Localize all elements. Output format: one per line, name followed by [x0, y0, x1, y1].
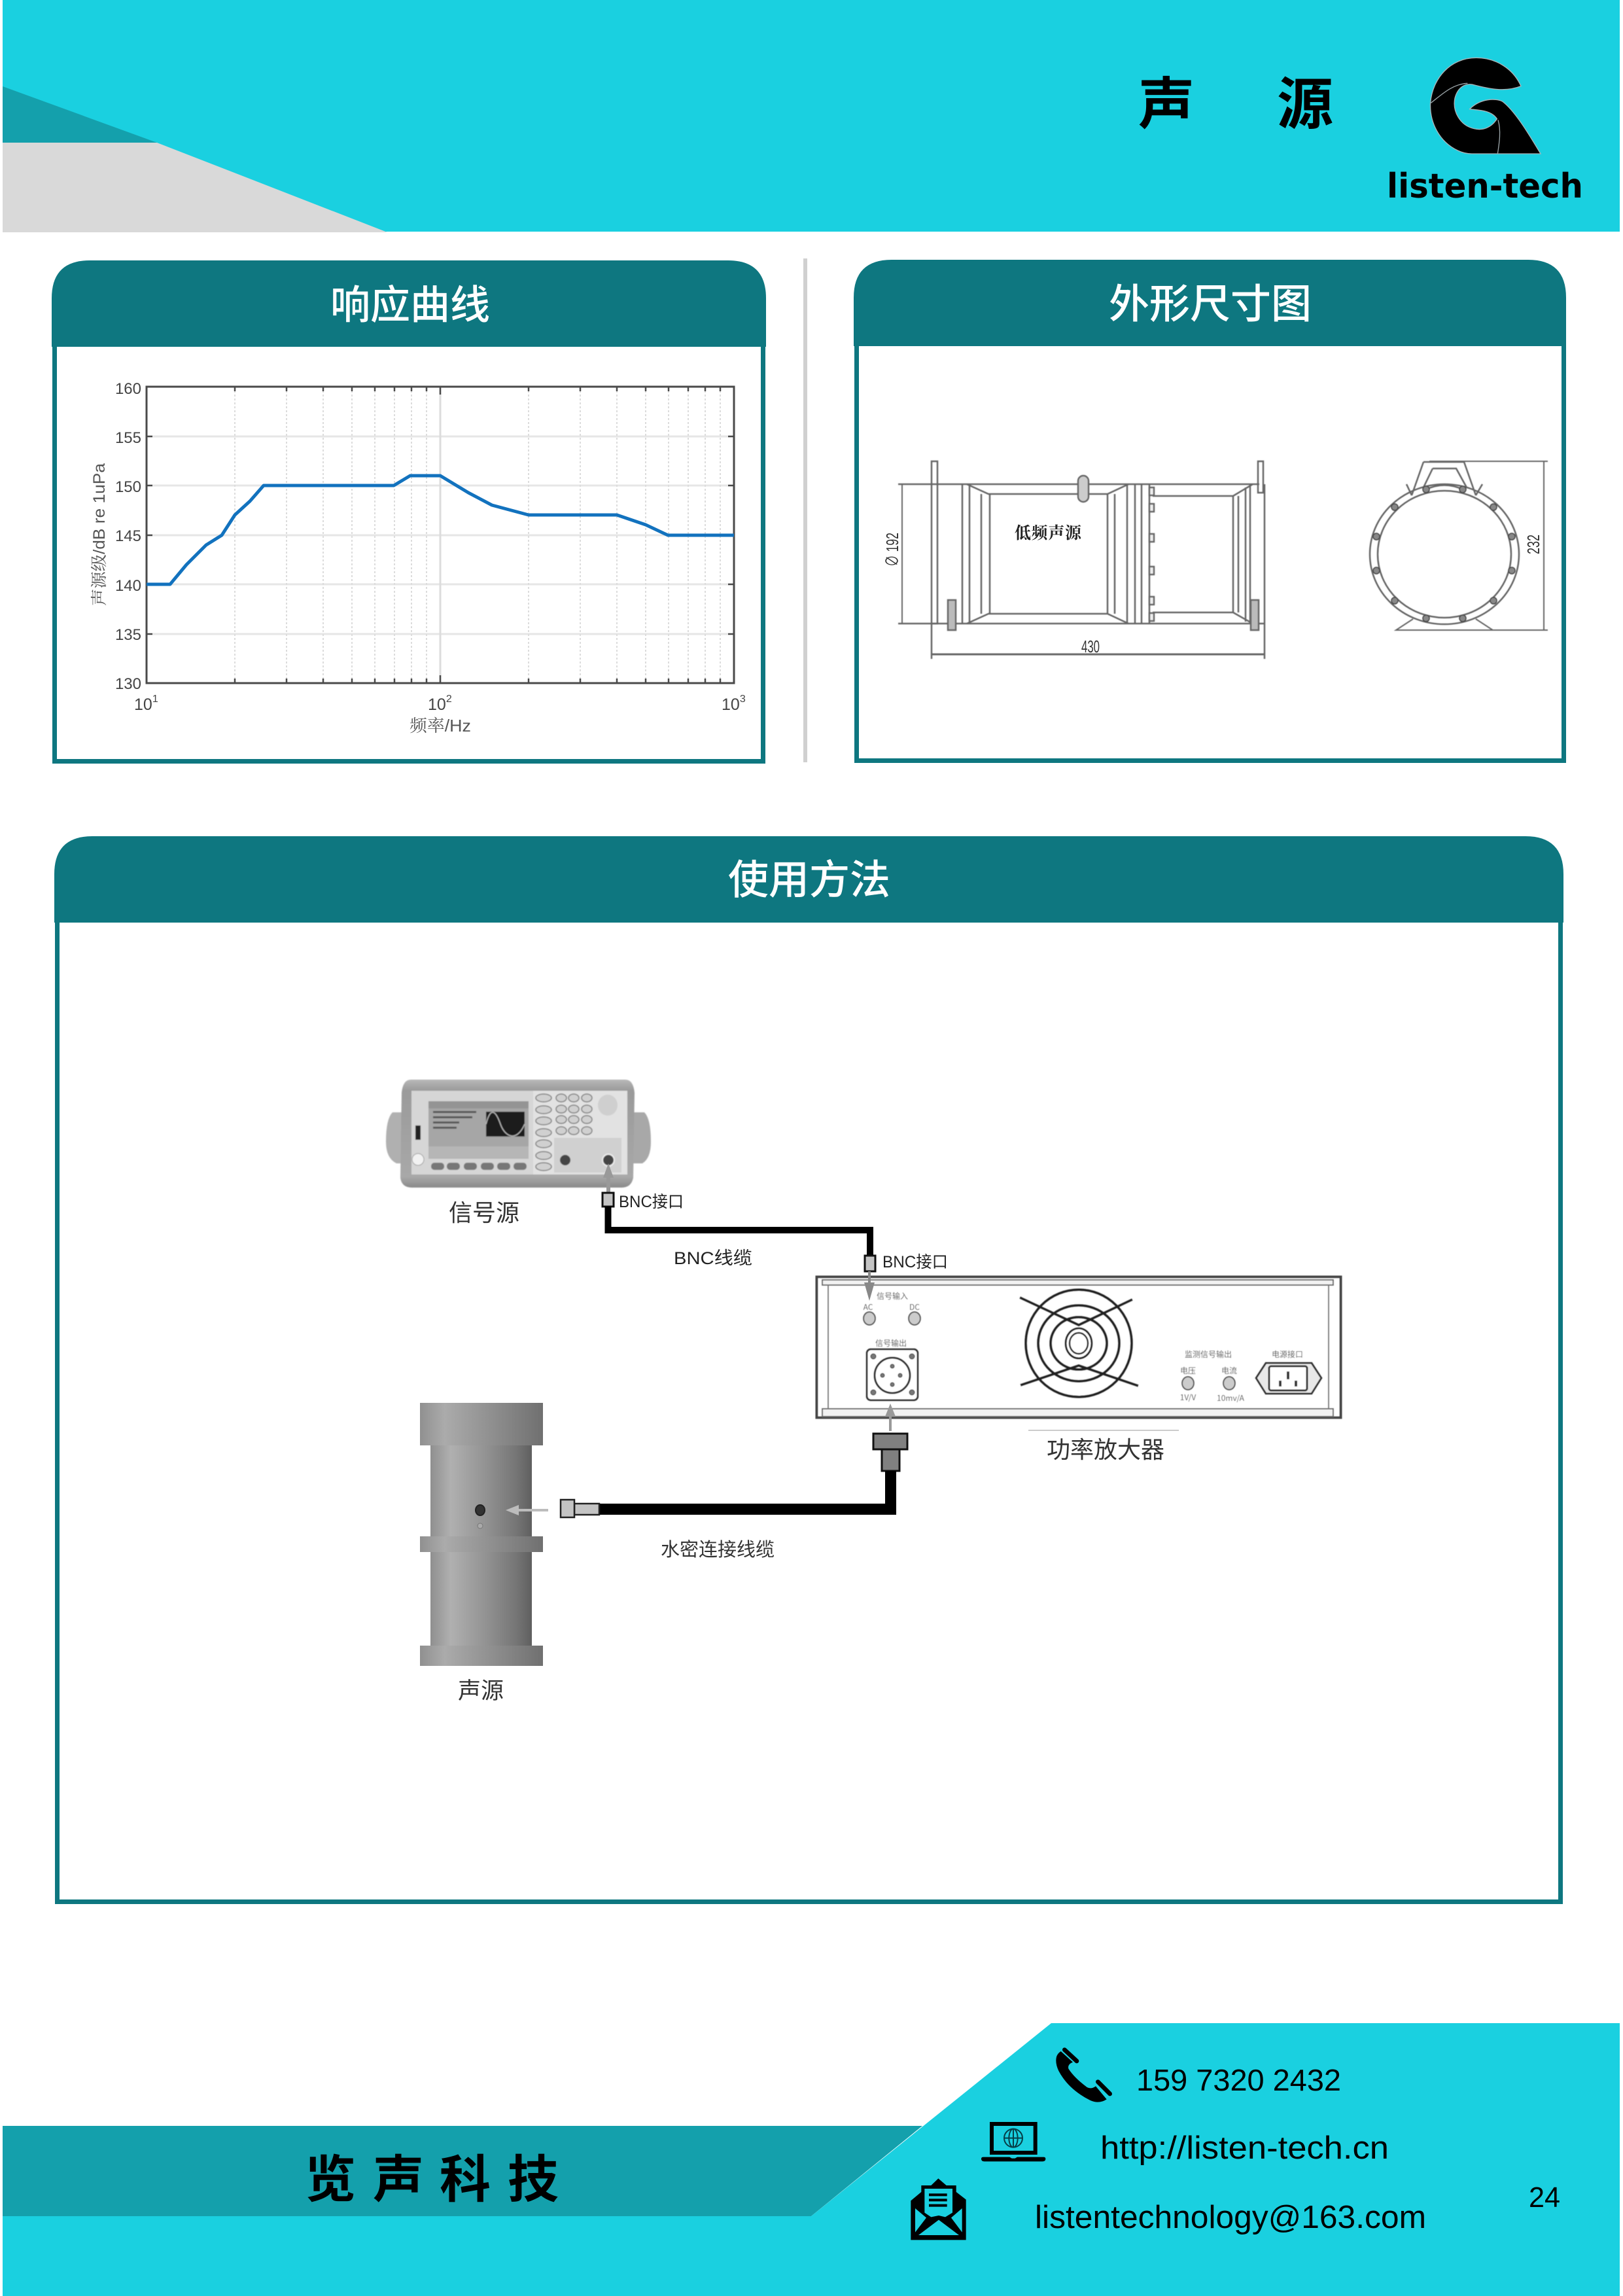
ticks [147, 387, 734, 683]
panel: outline dimensions [854, 260, 1566, 760]
amplifier small labels: 电源接口 [1272, 1349, 1303, 1360]
company name: 科 [440, 2139, 491, 2212]
signal generator [386, 1080, 651, 1188]
logo G mark [1431, 58, 1541, 154]
y axis numbers: 135 [115, 626, 141, 644]
screen [428, 1101, 529, 1159]
amplifier small labels: 信号输入 [877, 1290, 908, 1301]
company name: 技 [508, 2139, 559, 2212]
input connectors [864, 1312, 1235, 1390]
panel: response curve [52, 260, 766, 762]
label: sound source: 声源 [458, 1672, 504, 1706]
x axis numbers: 3 [740, 694, 746, 705]
axes box [147, 387, 734, 683]
power amplifier [816, 1277, 1341, 1417]
label: power amplifier: 功率放大器 [1047, 1431, 1164, 1465]
x axis numbers [134, 694, 746, 714]
header dark triangle [3, 86, 157, 143]
grid [147, 436, 734, 634]
panel heading bar [54, 836, 1563, 923]
panel: outline dimensions: ∅ 192 [882, 533, 902, 567]
amplifier small labels: AC [864, 1301, 873, 1313]
x axis numbers: 10 [134, 696, 152, 714]
page title [1138, 58, 1333, 140]
header banner [3, 0, 1620, 232]
logo wordmark: listen-tech [1387, 167, 1583, 206]
x axis numbers: 1 [152, 694, 158, 705]
panel heading: 使用方法 [728, 847, 890, 906]
BNC cable [608, 1207, 870, 1255]
output connector [867, 1349, 918, 1400]
y axis numbers: 155 [115, 429, 141, 447]
company name [305, 2139, 559, 2212]
BNC connector top [602, 1193, 614, 1207]
arrow: generator to connector [603, 1163, 614, 1192]
line chart [90, 380, 746, 735]
footer dark band [3, 2126, 922, 2216]
x axis numbers: 2 [446, 694, 452, 705]
website: http://listen-tech.cn [1100, 2130, 1389, 2166]
waterproof cable [599, 1471, 891, 1509]
label: BNC cable: BNC线缆 [674, 1248, 752, 1268]
page title: 源 [1277, 58, 1333, 140]
panel heading: 外形尺寸图 [1109, 271, 1312, 330]
side view drawing [898, 461, 1265, 659]
y axis numbers: 130 [115, 675, 141, 693]
icon: laptop [981, 2124, 1045, 2161]
arrow: into output connector [885, 1404, 896, 1431]
x axis label: 频率/Hz [410, 716, 471, 735]
header gray wedge [3, 143, 387, 232]
amplifier small labels: 10mv/A [1217, 1392, 1245, 1404]
bolts [1149, 487, 1154, 621]
drawing labels: 低频声源 [1015, 524, 1083, 542]
icon: phone [1056, 2050, 1110, 2102]
amplifier small labels: 电压 [1180, 1365, 1196, 1376]
soft keys [431, 1163, 527, 1170]
y axis numbers: 145 [115, 527, 141, 545]
page title: 声 [1138, 58, 1195, 140]
response curve line [147, 476, 734, 584]
y axis label: 声源级/dB re 1uPa [90, 463, 109, 606]
arrow: BNC into amplifier [864, 1271, 875, 1301]
amplifier small labels: 1V/V [1180, 1392, 1196, 1403]
front view drawing [1370, 461, 1548, 630]
height dimension: 232 [1524, 535, 1543, 554]
BNC connector amplifier [865, 1256, 875, 1271]
y axis numbers: 160 [115, 380, 141, 398]
fan [1020, 1290, 1138, 1397]
phone number: 159 7320 2432 [1136, 2063, 1341, 2097]
feet [948, 600, 956, 630]
email: listentechnology@163.com [1035, 2200, 1426, 2235]
y axis numbers [115, 380, 141, 693]
logo [1387, 58, 1583, 206]
amplifier small labels: 信号输出 [875, 1337, 907, 1349]
panel heading: 响应曲线 [330, 272, 490, 330]
company name: 览 [305, 2139, 356, 2212]
panel: outline dimensions: 430 [1081, 637, 1100, 656]
buttons [536, 1094, 592, 1171]
cable plug [561, 1500, 599, 1517]
panel: usage [54, 836, 1563, 1901]
amplifier small labels [864, 1290, 1303, 1404]
label: BNC port 1: BNC接口 [619, 1193, 684, 1211]
large connector [873, 1434, 907, 1471]
x axis numbers: 10 [428, 696, 446, 714]
amplifier small labels: 监测信号输出 [1185, 1349, 1232, 1360]
power socket [1256, 1363, 1321, 1394]
footer cyan shape [3, 2023, 1620, 2296]
x axis numbers: 10 [722, 696, 740, 714]
label: BNC port 2: BNC接口 [882, 1253, 948, 1271]
label: waterproof cable: 水密连接线缆 [661, 1534, 775, 1562]
label: signal source: 信号源 [449, 1194, 519, 1228]
rule under amplifier [1028, 1430, 1179, 1431]
handle [1078, 476, 1089, 502]
panel heading bar [52, 260, 766, 347]
amplifier small labels: 电流 [1221, 1365, 1237, 1376]
arrow: into sound source [506, 1505, 548, 1515]
company name: 声 [373, 2139, 424, 2212]
y axis numbers: 150 [115, 478, 141, 496]
footer [3, 2023, 1620, 2296]
page number: 24 [1529, 2181, 1560, 2214]
sound source cylinder [420, 1403, 543, 1666]
amplifier small labels: DC [909, 1301, 920, 1313]
y axis numbers: 140 [115, 577, 141, 595]
divider [803, 258, 807, 762]
panel heading bar [854, 260, 1566, 346]
icon: envelope [911, 2178, 966, 2240]
